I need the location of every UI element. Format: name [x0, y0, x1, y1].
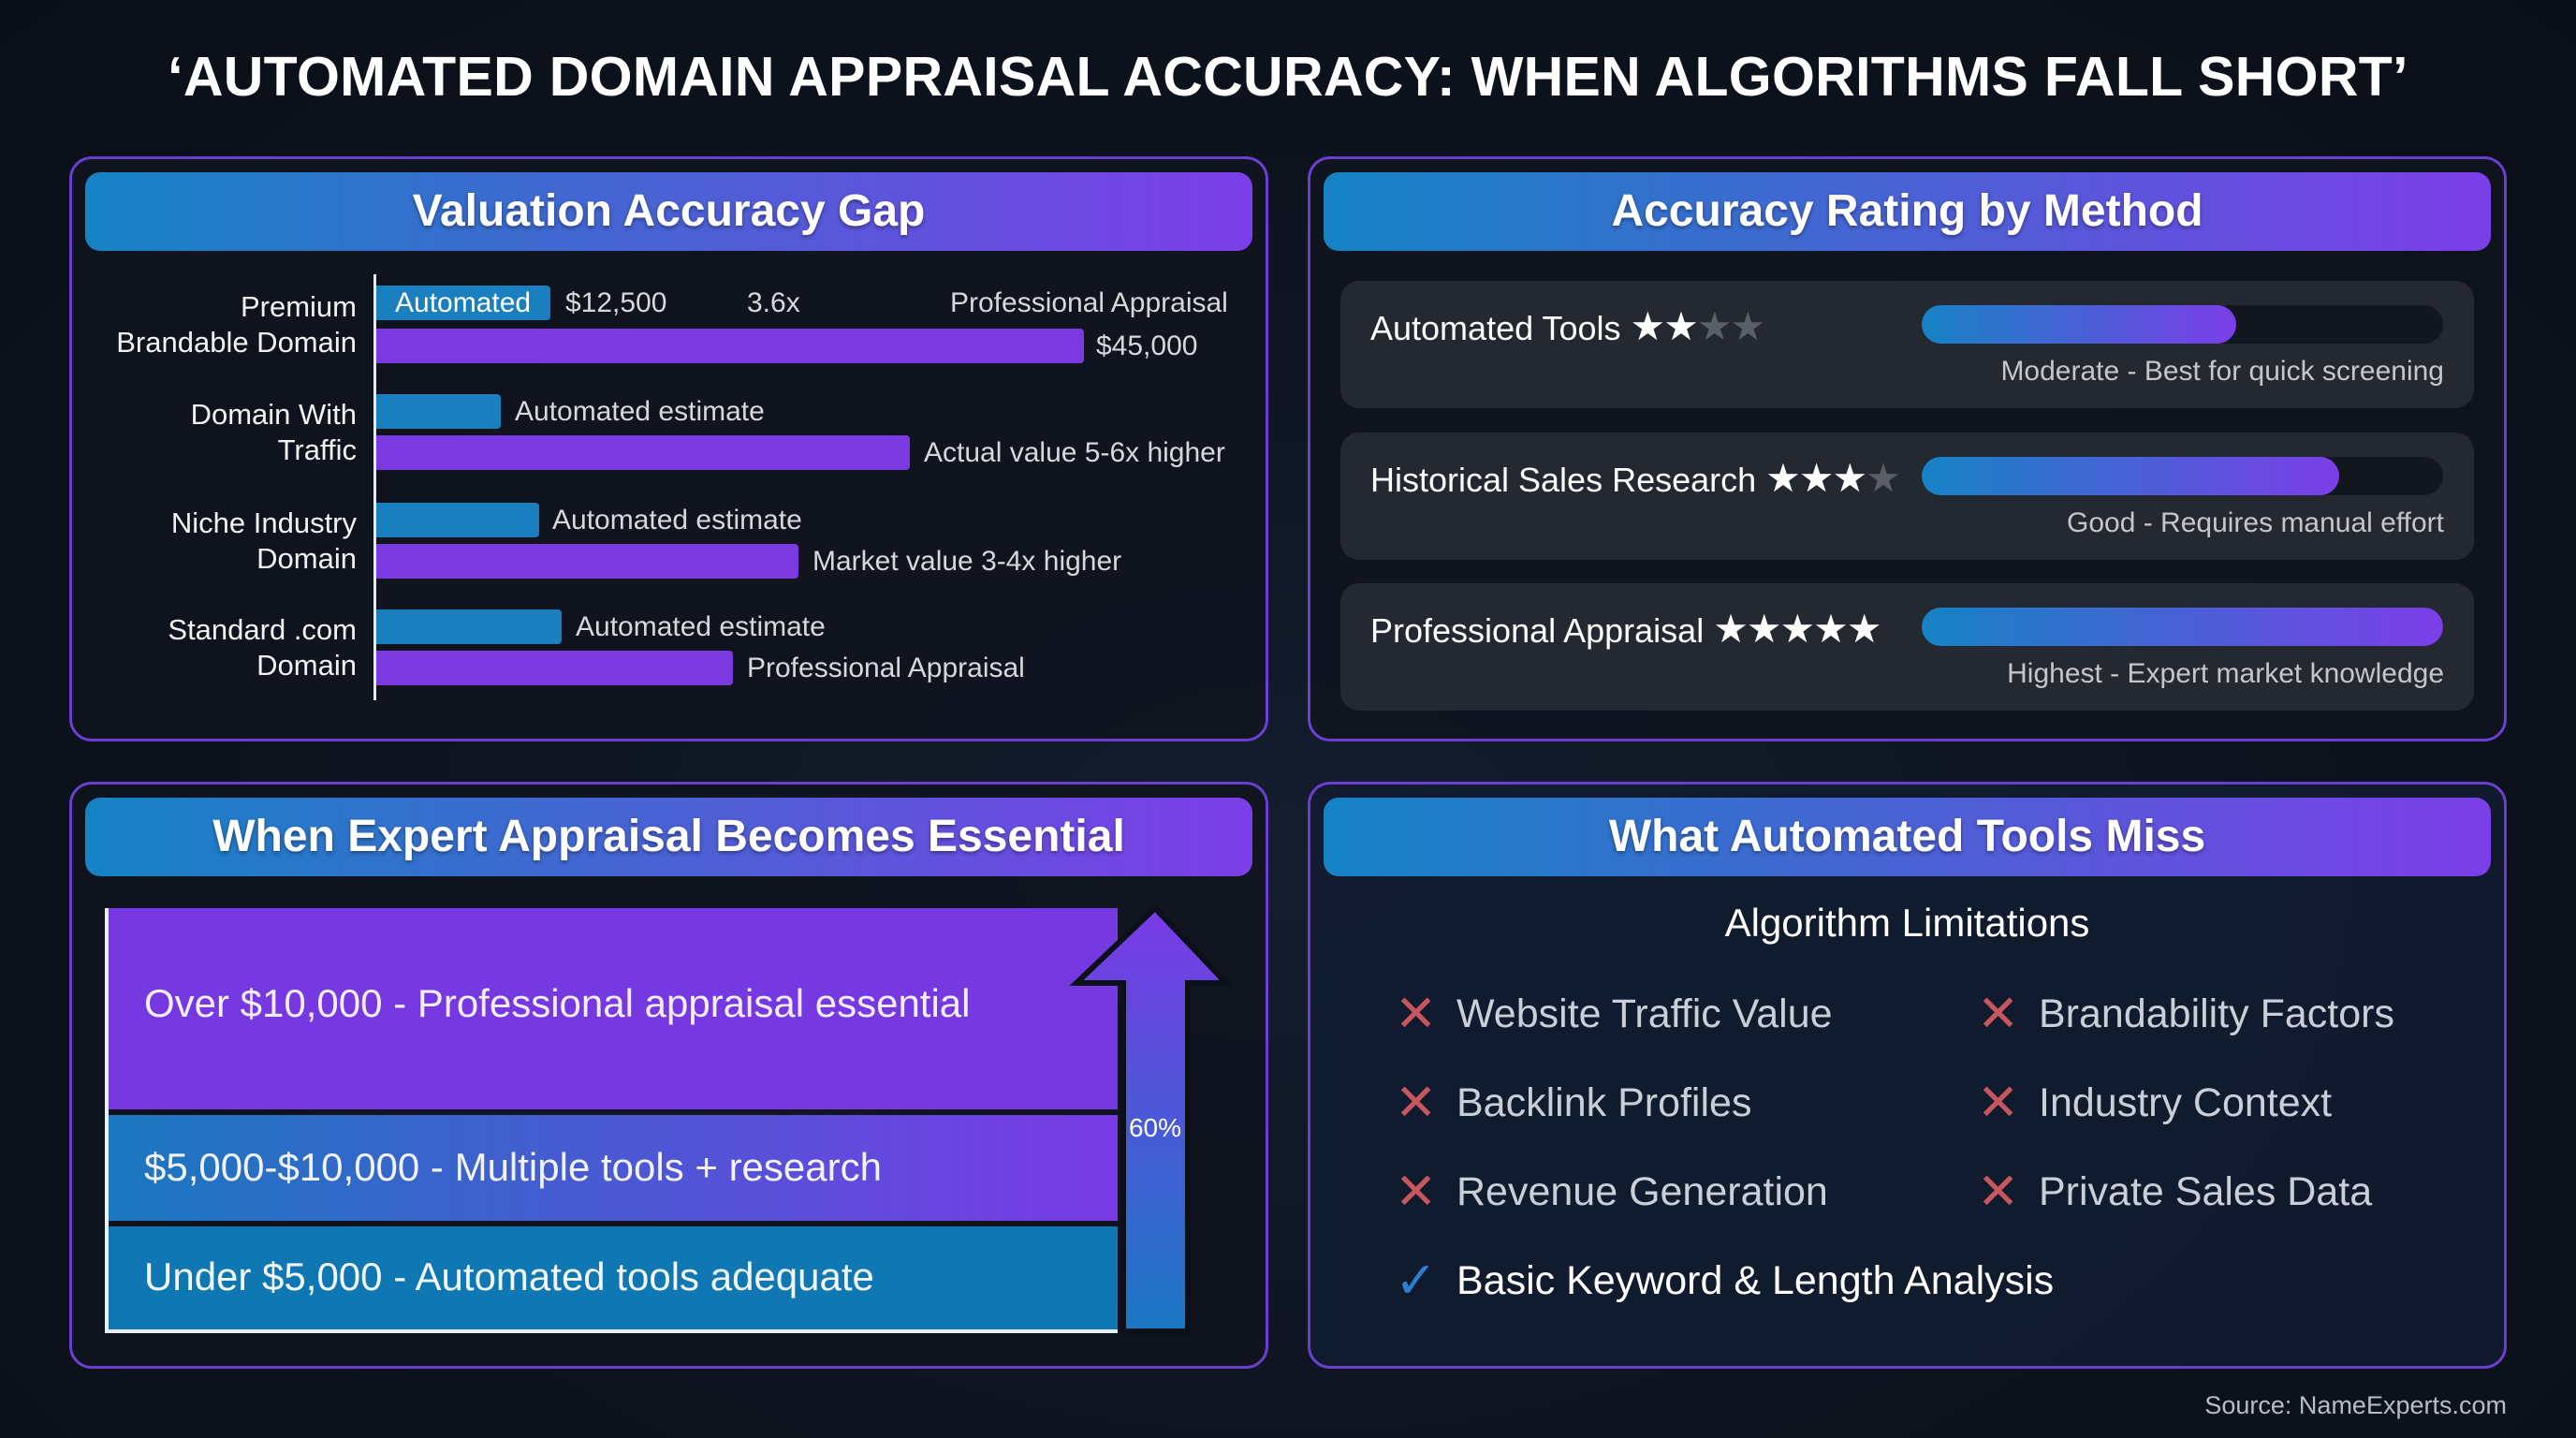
bars row 2 — [376, 394, 501, 429]
check item: ✓ — [1395, 1253, 1437, 1309]
tier: 5000-10000: $5,000-$10,000 - Multiple tools + research — [144, 1145, 882, 1189]
panel: valuation accuracy gap — [69, 156, 1268, 741]
bars row 3 — [376, 503, 539, 537]
bar chart: valuation gap: Automated estimate — [515, 396, 765, 427]
title: ‘AUTOMATED DOMAIN APPRAISAL ACCURACY: WHEN ALGORITHMS FALL SHORT’ — [168, 46, 2408, 108]
heading: accuracy rating: Accuracy Rating by Method — [1611, 186, 2203, 236]
heading: expert appraisal — [85, 798, 1252, 876]
tier stack — [105, 908, 1118, 1333]
axis line — [373, 274, 376, 700]
bar chart: valuation gap: Actual value 5-6x higher — [924, 437, 1225, 468]
list: limitations: Backlink Profiles — [1456, 1080, 1751, 1125]
source: Source: NameExperts.com — [2204, 1391, 2507, 1419]
card: professional appraisal: Highest - Expert market knowledge — [2007, 658, 2444, 689]
card: historical sales research: Historical Sales Research ★★★★ — [1370, 456, 1899, 500]
list: limitations: ✕ — [1977, 1164, 2019, 1220]
list: limitations: ✕ — [1977, 986, 2019, 1042]
bar chart: valuation gap: Professional Appraisal — [747, 653, 1025, 683]
category labels — [116, 290, 357, 359]
category labels: Premium — [241, 290, 357, 323]
bar chart: valuation gap: Automated — [395, 287, 531, 318]
list: limitations: Private Sales Data — [2039, 1169, 2372, 1214]
card: automated tools — [1340, 281, 2474, 408]
bar chart: valuation gap: Professional Appraisal — [950, 287, 1228, 318]
panel: accuracy rating by method — [1308, 156, 2507, 741]
list: limitations: Brandability Factors — [2039, 991, 2394, 1036]
bars row 1 — [376, 286, 550, 320]
card: historical sales research — [1340, 433, 2474, 560]
heading: what tools miss — [1324, 798, 2491, 876]
list: limitations — [1395, 986, 2394, 1309]
list: limitations: ✕ — [1395, 986, 1437, 1042]
panel: when expert appraisal becomes essential — [69, 782, 1268, 1369]
panel: what automated tools miss — [1308, 782, 2507, 1369]
category labels: Brandable Domain — [116, 326, 357, 359]
heading: expert appraisal: When Expert Appraisal Becomes Essential — [212, 812, 1125, 861]
tier: under 5000 — [109, 1226, 1118, 1329]
subheading: algorithm limitations: Algorithm Limitations — [1725, 901, 2089, 945]
bar chart: valuation gap: Domain — [256, 542, 357, 575]
card: professional appraisal: Professional Appraisal ★★★★★ — [1370, 607, 1880, 651]
bar chart: valuation gap: Standard .com — [168, 613, 357, 646]
heading: accuracy rating — [1324, 172, 2491, 251]
arrow: upward 60% — [1069, 904, 1226, 1328]
bar chart: valuation gap: Automated estimate — [576, 611, 826, 642]
bar chart: valuation gap: Domain — [256, 649, 357, 682]
heading: valuation accuracy gap — [85, 172, 1252, 251]
bar chart: valuation gap: Traffic — [278, 433, 357, 466]
bar chart: valuation gap: Domain With — [191, 398, 357, 431]
list: limitations: ✕ — [1395, 1164, 1437, 1220]
list: limitations: ✕ — [1395, 1075, 1437, 1131]
list: limitations: Website Traffic Value — [1456, 991, 1833, 1036]
card: automated tools: Automated Tools ★★★★ — [1370, 304, 1764, 348]
card: professional appraisal — [1340, 583, 2474, 711]
arrow: upward 60%: 60% — [1129, 1113, 1181, 1142]
bar chart: valuation gap: Automated estimate — [552, 505, 802, 536]
check item: Basic Keyword & Length Analysis — [1456, 1258, 2054, 1303]
bars row 4 — [376, 609, 562, 644]
bar chart: valuation gap: $12,500 — [565, 287, 666, 318]
tier: under 5000: Under $5,000 - Automated tools adequate — [144, 1255, 874, 1299]
tier: over 10000 — [109, 908, 1118, 1109]
bar chart: valuation gap: Market value 3-4x higher — [812, 546, 1121, 577]
tier: over 10000: Over $10,000 - Professional appraisal essential — [144, 981, 970, 1025]
tier: 5000-10000 — [109, 1115, 1118, 1221]
card: automated tools: Moderate - Best for quick screening — [2000, 356, 2444, 387]
bar chart: valuation gap: Niche Industry — [171, 506, 357, 539]
heading: valuation accuracy gap: Valuation Accuracy Gap — [413, 186, 925, 236]
bar chart: valuation gap: 3.6x — [747, 287, 800, 318]
bar chart: valuation gap: $45,000 — [1096, 330, 1197, 361]
list: limitations: ✕ — [1977, 1075, 2019, 1131]
heading: what tools miss: What Automated Tools Miss — [1609, 812, 2205, 861]
list: limitations: Industry Context — [2039, 1080, 2332, 1125]
list: limitations: Revenue Generation — [1456, 1169, 1828, 1214]
bar chart: valuation gap — [116, 274, 1228, 700]
card: historical sales research: Good - Requires manual effort — [2067, 507, 2444, 538]
